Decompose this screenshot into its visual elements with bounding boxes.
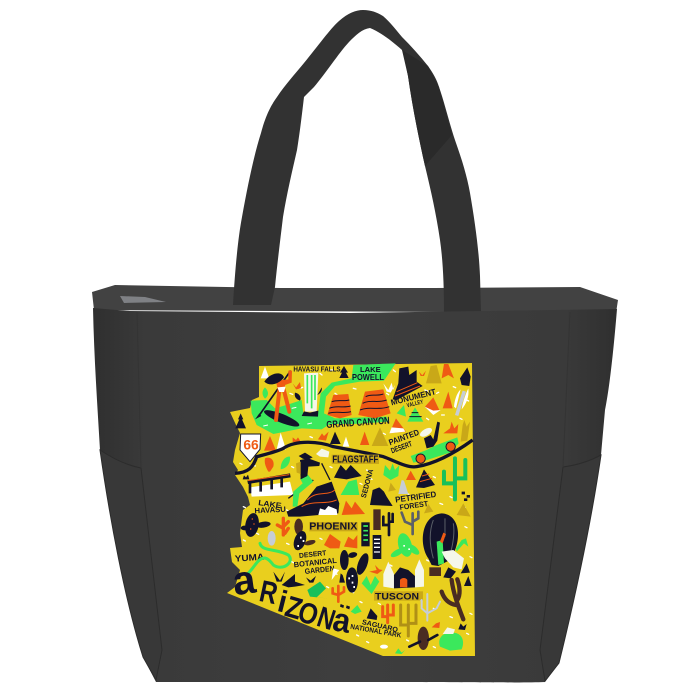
label: desert: DESERT	[299, 550, 327, 560]
torso and arm	[276, 371, 292, 392]
label: lake havasu line two: HAVASU	[254, 505, 287, 515]
left pocket	[100, 450, 162, 680]
orange plants	[293, 371, 426, 389]
trekking poles	[288, 463, 330, 498]
rock	[327, 394, 352, 418]
tower stripes	[374, 539, 380, 552]
label: garden: GARDEN	[304, 564, 335, 576]
white agave	[383, 383, 395, 393]
strata	[360, 394, 389, 410]
water streaks	[307, 375, 315, 408]
west beavertail cactus	[241, 512, 271, 538]
orange peak	[425, 397, 439, 413]
rear wheel	[416, 454, 425, 463]
green agave	[362, 576, 379, 594]
hiker	[288, 453, 330, 507]
northern map section	[235, 363, 473, 517]
left pad	[340, 550, 349, 570]
bag side panel seams	[137, 312, 570, 468]
person	[456, 538, 468, 552]
strata	[328, 400, 351, 413]
city tower striped	[373, 535, 381, 559]
letter z: Z	[281, 590, 306, 626]
route number: 66	[243, 436, 259, 452]
black rock with orange band	[367, 608, 377, 620]
hiker mountain	[287, 482, 339, 517]
label: sedona: SEDONA	[359, 468, 375, 499]
waterfall	[302, 373, 318, 417]
speckle marks south	[243, 527, 472, 648]
car body	[411, 437, 459, 463]
orange agave	[443, 422, 458, 433]
orange deck line	[248, 475, 289, 481]
label: valley: VALLEY	[406, 399, 424, 409]
label: lake havasu line one: LAKE	[258, 498, 282, 510]
orange pine	[264, 436, 276, 451]
label: lake: LAKE	[360, 365, 381, 374]
label: powell: POWELL	[352, 372, 384, 382]
small black agave	[339, 573, 345, 583]
state outline	[227, 363, 475, 656]
white band low	[389, 427, 405, 433]
green leaf	[281, 457, 290, 469]
snow tuft	[316, 449, 329, 457]
spines	[348, 575, 355, 588]
southern map section	[230, 509, 472, 654]
bridge piers	[250, 478, 282, 493]
monument valley butte	[393, 367, 423, 400]
grey cactus	[402, 512, 418, 534]
large black prickly pear	[340, 550, 371, 593]
label: national park: NATIONAL PARK	[350, 624, 402, 640]
base rocks	[302, 411, 318, 417]
letter n: N	[313, 601, 339, 637]
paddle boarder	[255, 371, 301, 429]
label: petrified: PETRIFIED	[395, 489, 437, 505]
label: havasu falls: HAVASU FALLS	[293, 364, 341, 373]
label: monument: MONUMENT	[390, 386, 437, 407]
white water	[250, 482, 293, 497]
brown saguaro	[442, 579, 463, 619]
route 66 shield	[240, 434, 261, 462]
center pad	[395, 532, 415, 558]
mountain	[287, 482, 339, 517]
black cactus	[383, 513, 393, 535]
label: forest: FOREST	[399, 499, 429, 512]
white top	[443, 627, 455, 634]
speckle marks	[240, 370, 469, 511]
board	[262, 407, 301, 429]
left tower	[383, 562, 394, 588]
canyon rock right	[358, 389, 391, 418]
top-right small pad	[347, 551, 358, 559]
orange spike	[440, 533, 446, 543]
white dots	[403, 545, 410, 550]
rock	[358, 389, 391, 418]
top pad	[294, 519, 303, 535]
mustard saguaro	[401, 605, 416, 636]
label: painted: PAINTED	[387, 427, 420, 447]
orange rock	[342, 501, 365, 515]
white pines	[277, 433, 349, 449]
front wheel	[446, 442, 455, 451]
lower pad	[346, 567, 358, 593]
driver hat	[419, 426, 433, 439]
lake and river	[251, 363, 396, 434]
basket	[429, 567, 441, 576]
mustard plant	[461, 420, 470, 442]
hair	[264, 373, 284, 384]
striped mound	[389, 418, 406, 433]
route 66 road	[235, 440, 473, 473]
grey barrel	[268, 531, 276, 546]
jacket	[300, 458, 320, 479]
orange pine 2	[360, 432, 369, 445]
city tower green	[361, 522, 370, 546]
envelope	[423, 513, 458, 566]
grey rock spire	[455, 391, 466, 416]
white sprig	[332, 568, 339, 580]
water	[304, 373, 318, 412]
green triangle	[397, 405, 406, 417]
flagstaff mountains	[334, 465, 362, 479]
label: grand canyon: GRAND CANYON	[326, 416, 390, 431]
right pocket	[540, 455, 601, 681]
dark rock stripes	[420, 474, 432, 482]
right pad	[354, 552, 371, 576]
white bush	[454, 388, 469, 409]
legs	[276, 391, 289, 420]
orange plant	[369, 565, 383, 574]
white tree top-left	[261, 367, 269, 378]
main pad	[243, 512, 261, 538]
green water marks	[263, 407, 312, 426]
brown tower	[373, 509, 381, 530]
dots	[340, 604, 350, 609]
mission church	[383, 559, 424, 588]
pad	[418, 627, 429, 650]
orange saguaro	[383, 605, 393, 623]
label: phoenix: PHOENIX	[309, 521, 358, 532]
right pad	[304, 539, 316, 546]
side pads	[409, 635, 437, 647]
cactus by phoenix	[291, 519, 316, 552]
black plant cluster	[273, 572, 316, 587]
left pine	[235, 413, 246, 428]
green sedona butte	[341, 479, 359, 495]
green mound stripes	[409, 413, 422, 417]
left pad	[241, 526, 249, 530]
orange rocks	[324, 534, 357, 548]
bag body	[93, 308, 617, 682]
label: flagstaff: FLAGSTAFF	[332, 455, 378, 466]
backpack	[296, 462, 301, 474]
small orange plant	[432, 622, 440, 628]
green legs	[293, 474, 313, 507]
grey spire	[398, 480, 408, 494]
south cactus	[409, 627, 437, 650]
white band	[425, 407, 441, 415]
envelope stripes	[430, 518, 454, 558]
green leaf	[262, 387, 268, 399]
spines	[297, 537, 304, 547]
orange mesa	[442, 364, 454, 378]
lake havasu bridge	[243, 473, 293, 497]
label: desert: DESERT	[390, 439, 414, 455]
mustard pine	[372, 427, 388, 446]
sedona rocks	[370, 487, 393, 506]
letter a end: a	[330, 601, 354, 641]
wordmark: arizona	[230, 555, 354, 641]
black dots	[462, 492, 470, 501]
black rocks	[443, 563, 472, 586]
black mesa	[460, 367, 471, 386]
orange crown	[293, 432, 329, 442]
canyon rock left	[327, 394, 352, 418]
letter a: a	[230, 555, 259, 604]
body	[439, 633, 463, 651]
paddle	[258, 371, 291, 417]
green barrel cactus	[307, 582, 327, 598]
spines	[250, 518, 255, 530]
hat	[299, 453, 313, 460]
bag rim opening	[92, 285, 618, 313]
vintage car with driver	[411, 422, 459, 463]
mustard plants	[388, 483, 471, 517]
tree row	[235, 413, 388, 451]
label: botanical: BOTANICAL	[293, 556, 338, 569]
small yuma label: YUMA	[234, 552, 265, 564]
white pebbles	[380, 645, 388, 649]
orange small cactus	[333, 586, 344, 602]
pine tree	[339, 366, 349, 378]
white sheep	[442, 550, 464, 569]
label: saguaro: SAGUARO	[361, 619, 399, 634]
Arizona map print	[227, 363, 475, 656]
orange cactus	[277, 518, 288, 535]
handle fold shadow	[402, 50, 452, 166]
green bottom plant	[395, 648, 405, 654]
paddle blade	[255, 413, 261, 419]
striped orange rock	[406, 471, 416, 480]
green mound	[407, 407, 423, 422]
crown icon	[243, 475, 249, 479]
letter o: O	[294, 595, 322, 633]
phoenix label background	[309, 522, 358, 531]
driver	[424, 422, 440, 448]
swimsuit	[277, 387, 286, 392]
tower windows	[363, 526, 368, 540]
bridge deck	[247, 473, 291, 484]
green shrub	[351, 605, 362, 614]
flagstaff label background	[332, 455, 379, 464]
white saguaro	[422, 594, 440, 621]
right tower	[415, 559, 424, 587]
bag interior highlight	[120, 296, 166, 303]
leaves	[295, 387, 322, 401]
green snake	[247, 543, 290, 575]
green cactus on balloon	[437, 540, 444, 565]
side pad	[256, 521, 271, 529]
door	[400, 578, 407, 587]
mustard mesa	[426, 365, 442, 383]
green agave	[383, 463, 399, 480]
snow	[318, 506, 337, 515]
bag handle	[233, 10, 481, 312]
letter r: R	[257, 574, 281, 611]
butte	[393, 367, 423, 400]
letter i: i	[274, 584, 291, 620]
label: tuscon: TUSCON	[375, 591, 419, 601]
green round cactus	[439, 627, 463, 651]
mesa row at top right	[426, 364, 471, 386]
painted desert mounds	[389, 392, 453, 433]
center	[394, 567, 415, 588]
small black plant	[458, 623, 467, 630]
green saguaro	[444, 458, 465, 499]
tuscon label background	[374, 591, 423, 601]
orange spike	[443, 392, 453, 408]
shield	[240, 434, 261, 462]
dark striped rock	[416, 469, 435, 488]
black pine	[330, 432, 341, 444]
right pad	[406, 542, 421, 557]
green prickly pear	[389, 532, 421, 559]
lower pad	[291, 529, 309, 552]
hot air balloon small	[265, 458, 274, 472]
hot air balloon	[423, 513, 468, 576]
strata	[395, 383, 420, 396]
strata	[302, 490, 337, 507]
left pad	[389, 546, 405, 559]
